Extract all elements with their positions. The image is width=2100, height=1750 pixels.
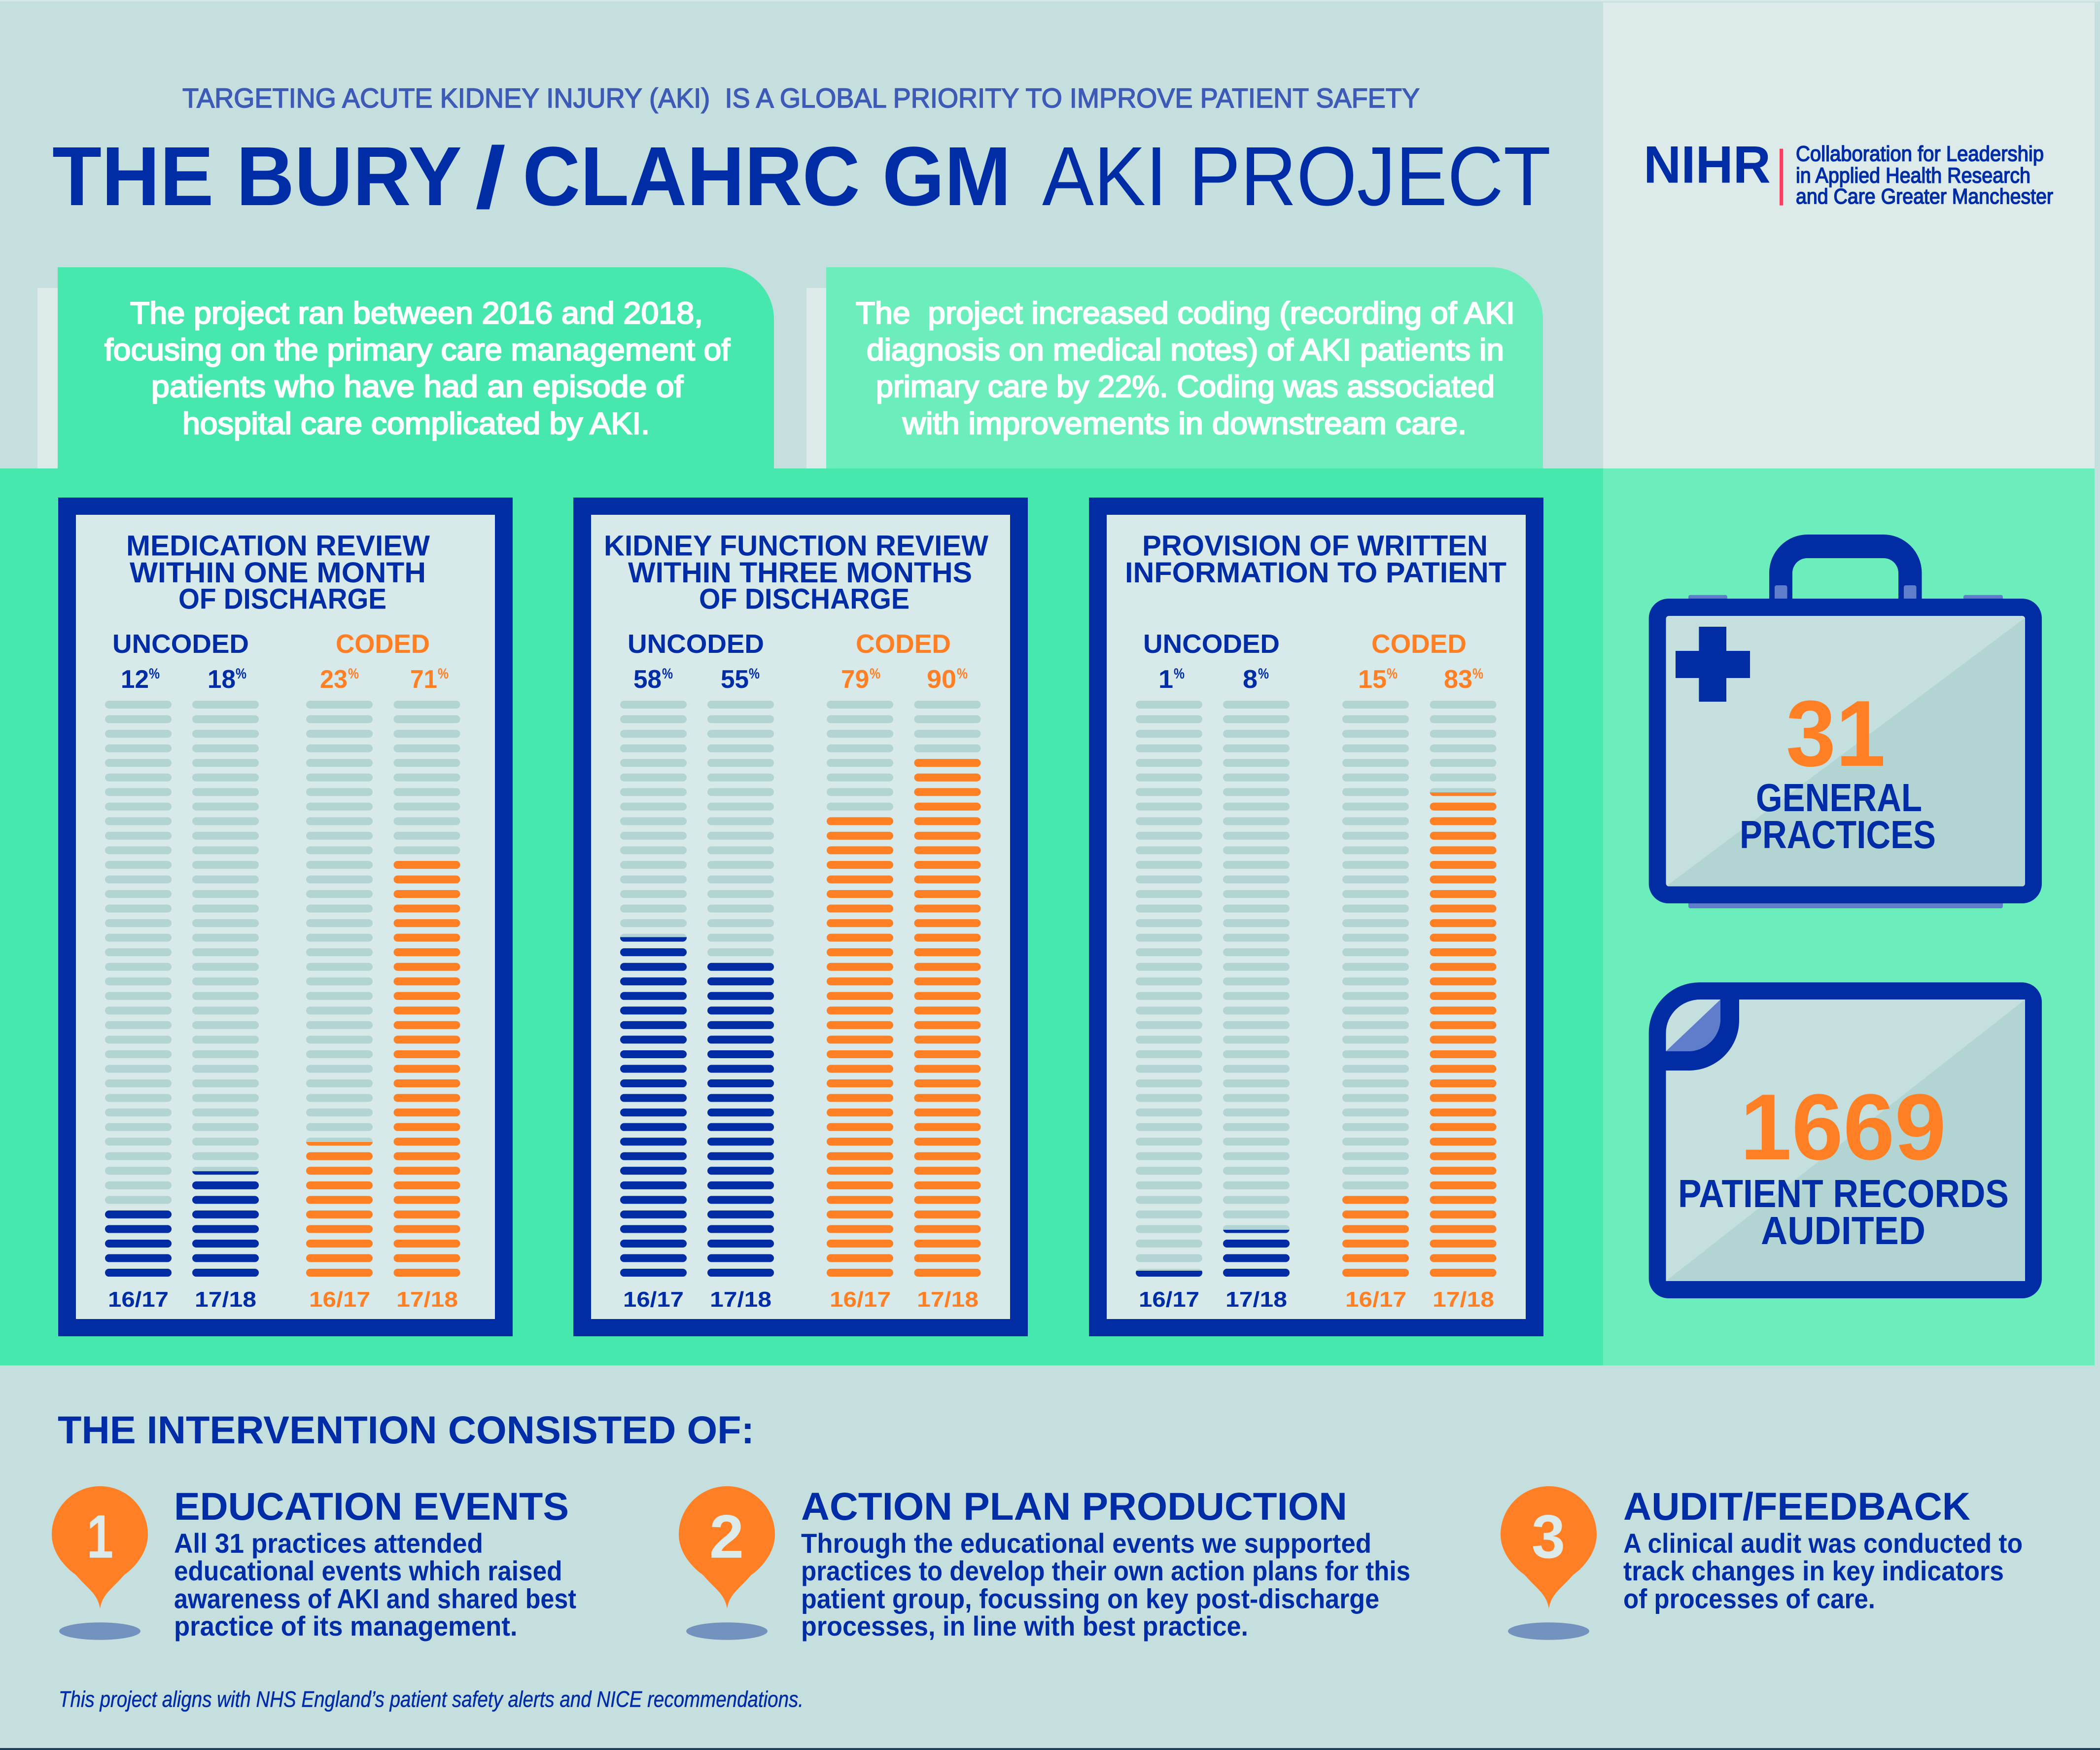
year labels (108, 1287, 458, 1312)
heading: intervention: THE INTERVENTION CONSISTED OF: (58, 1408, 754, 1452)
percentages: 71 (410, 665, 437, 694)
percentages: % (236, 666, 246, 682)
panel: medication review chart (58, 498, 513, 1336)
step text: track changes in key indicators (1623, 1555, 2004, 1586)
chart title: OF DISCHARGE (178, 583, 386, 615)
panel: coding increase callout (806, 267, 1543, 468)
percentages: 90 (927, 665, 956, 694)
step text: Through the educational events we supported (801, 1528, 1371, 1559)
bar columns (1136, 701, 1497, 1277)
group labels (112, 629, 430, 659)
year labels: 16/17 (623, 1287, 684, 1312)
icon: cross (1676, 627, 1750, 702)
step 1: education events (52, 1484, 576, 1642)
stat: 31 general practices: 31 (1786, 681, 1886, 786)
percentages (1158, 665, 1483, 694)
percentages: 55 (721, 665, 749, 694)
step heading: ACTION PLAN PRODUCTION (801, 1484, 1347, 1528)
percentages: % (957, 666, 968, 682)
year labels: 17/18 (710, 1287, 771, 1312)
year labels: 17/18 (1433, 1287, 1494, 1312)
icon: patient record document (1649, 982, 2042, 1298)
panel: written information chart (1089, 498, 1543, 1336)
percentages: % (662, 666, 673, 682)
title: CLAHRC GM (523, 130, 1011, 223)
group labels: UNCODED (628, 629, 764, 659)
year labels: 16/17 (1139, 1287, 1199, 1312)
percentages: % (870, 666, 880, 682)
year labels (623, 1287, 979, 1312)
percentages: % (1174, 666, 1185, 682)
step text: patient group, focussing on key post-discharge (801, 1583, 1379, 1614)
group labels: CODED (1371, 629, 1467, 659)
panel: coding increase callout: diagnosis on medical notes) of AKI patients in (867, 333, 1504, 367)
chart title: INFORMATION TO PATIENT (1125, 557, 1506, 589)
step text: of processes of care. (1623, 1583, 1875, 1614)
panel: project dates callout: focusing on the primary care management of (105, 333, 731, 367)
step text: All 31 practices attended (174, 1528, 483, 1559)
icon: pin 1 (52, 1486, 148, 1640)
percentages: 23 (320, 665, 348, 694)
percentages: 79 (841, 665, 869, 694)
stat: 31 general practices (1740, 681, 1936, 857)
percentages: 83 (1444, 665, 1472, 694)
footnote: This project aligns with NHS England’s patient safety alerts and NICE recommendations. (59, 1687, 804, 1712)
group labels: UNCODED (112, 629, 249, 659)
step text: processes, in line with best practice. (801, 1610, 1248, 1642)
icon: pin 1: 1 (87, 1503, 113, 1571)
logo: NIHR: Collaboration for Leadership (1796, 142, 2044, 166)
stat: 1669 patient records audited: PATIENT RECORDS (1678, 1172, 2009, 1215)
percentages: % (438, 666, 449, 682)
step text (1623, 1528, 2023, 1614)
step heading: EDUCATION EVENTS (174, 1484, 569, 1528)
step text: awareness of AKI and shared best (174, 1583, 576, 1614)
year labels: 17/18 (396, 1287, 458, 1312)
year labels (1139, 1287, 1494, 1312)
panel: project dates callout (37, 267, 774, 468)
chart title: PROVISION OF WRITTEN (1142, 530, 1488, 562)
kicker heading: TARGETING ACUTE KIDNEY INJURY (AKI) IS A GLOBAL PRIORITY TO IMPROVE PATIENT SAFETY (182, 82, 1420, 113)
percentages (121, 665, 449, 694)
chart title: WITHIN THREE MONTHS (628, 557, 972, 589)
bar columns (105, 701, 460, 1277)
icon: folded corner (1666, 1000, 1739, 1071)
year labels: 16/17 (830, 1287, 891, 1312)
step text: educational events which raised (174, 1555, 562, 1586)
stat: 31 general practices: GENERAL (1756, 776, 1922, 820)
logo: NIHR: in Applied Health Research (1796, 164, 2030, 188)
icon: pin 2: 2 (709, 1503, 744, 1571)
percentages: 8 (1243, 665, 1258, 694)
panel: coding increase callout: with improvements in downstream care. (902, 407, 1467, 441)
chart title (604, 530, 988, 615)
panel: coding increase callout: The project increased coding (recording of AKI (856, 296, 1515, 330)
stat: 1669 patient records audited (1678, 1075, 2009, 1252)
panel: pale green stats band (1603, 468, 2095, 1365)
step text: practice of its management. (174, 1610, 518, 1642)
percentages: 1 (1158, 665, 1173, 694)
step 2: action plan production (679, 1484, 1410, 1642)
panel: project dates callout: The project ran between 2016 and 2018, (130, 296, 703, 330)
group labels: UNCODED (1143, 629, 1280, 659)
logo: NIHR: and Care Greater Manchester (1796, 184, 2053, 209)
percentages: % (749, 666, 760, 682)
icon: pin 3: 3 (1532, 1503, 1565, 1571)
chart title (1125, 530, 1506, 589)
percentages: 18 (208, 665, 236, 694)
percentages: % (149, 666, 160, 682)
year labels: 16/17 (108, 1287, 169, 1312)
chart title: KIDNEY FUNCTION REVIEW (604, 530, 988, 562)
stat: 1669 patient records audited: AUDITED (1761, 1209, 1925, 1252)
percentages: % (1387, 666, 1398, 682)
logo: NIHR (1644, 135, 2053, 209)
group labels (1143, 629, 1467, 659)
panel: green results band (0, 468, 1603, 1365)
group labels (628, 629, 951, 659)
panel: project dates callout: hospital care complicated by AKI. (182, 407, 650, 441)
percentages (633, 665, 968, 694)
panel: kidney function review chart (573, 498, 1028, 1336)
year labels: 17/18 (195, 1287, 256, 1312)
logo: NIHR: NIHR (1644, 135, 1771, 194)
percentages: 58 (633, 665, 662, 694)
year labels: 16/17 (309, 1287, 370, 1312)
step heading: AUDIT/FEEDBACK (1623, 1484, 1970, 1528)
percentages: % (348, 666, 359, 682)
panel: coding increase callout: primary care by 22%. Coding was associated (876, 370, 1495, 404)
icon: pin 2 (679, 1486, 775, 1640)
stat: 31 general practices: PRACTICES (1740, 813, 1936, 857)
panel: project dates callout: patients who have had an episode of (151, 370, 684, 404)
chart title: MEDICATION REVIEW (126, 530, 430, 562)
percentages: % (1472, 666, 1483, 682)
chart title (126, 530, 430, 615)
icon: medical case with practice count (1649, 535, 2042, 908)
bar columns (620, 701, 981, 1277)
group labels: CODED (856, 629, 951, 659)
title (52, 130, 1551, 226)
title: AKI PROJECT (1042, 130, 1551, 223)
step text: practices to develop their own action plans for this (801, 1555, 1410, 1586)
chart title: OF DISCHARGE (699, 583, 910, 615)
percentages: % (1258, 666, 1269, 682)
step text (174, 1528, 576, 1642)
year labels: 17/18 (1225, 1287, 1287, 1312)
step 3: audit and feedback (1501, 1484, 2023, 1640)
step text (801, 1528, 1410, 1642)
group labels: CODED (336, 629, 430, 659)
panel: logo background (1603, 2, 2095, 468)
chart title: WITHIN ONE MONTH (130, 557, 426, 589)
year labels: 16/17 (1345, 1287, 1406, 1312)
percentages: 15 (1358, 665, 1387, 694)
year labels: 17/18 (917, 1287, 979, 1312)
title: / (475, 130, 506, 226)
icon: pin 3 (1501, 1486, 1597, 1640)
percentages: 12 (121, 665, 149, 694)
stat: 1669 patient records audited: 1669 (1740, 1075, 1946, 1179)
title: THE BURY (52, 130, 462, 223)
step text: A clinical audit was conducted to (1623, 1528, 2023, 1559)
